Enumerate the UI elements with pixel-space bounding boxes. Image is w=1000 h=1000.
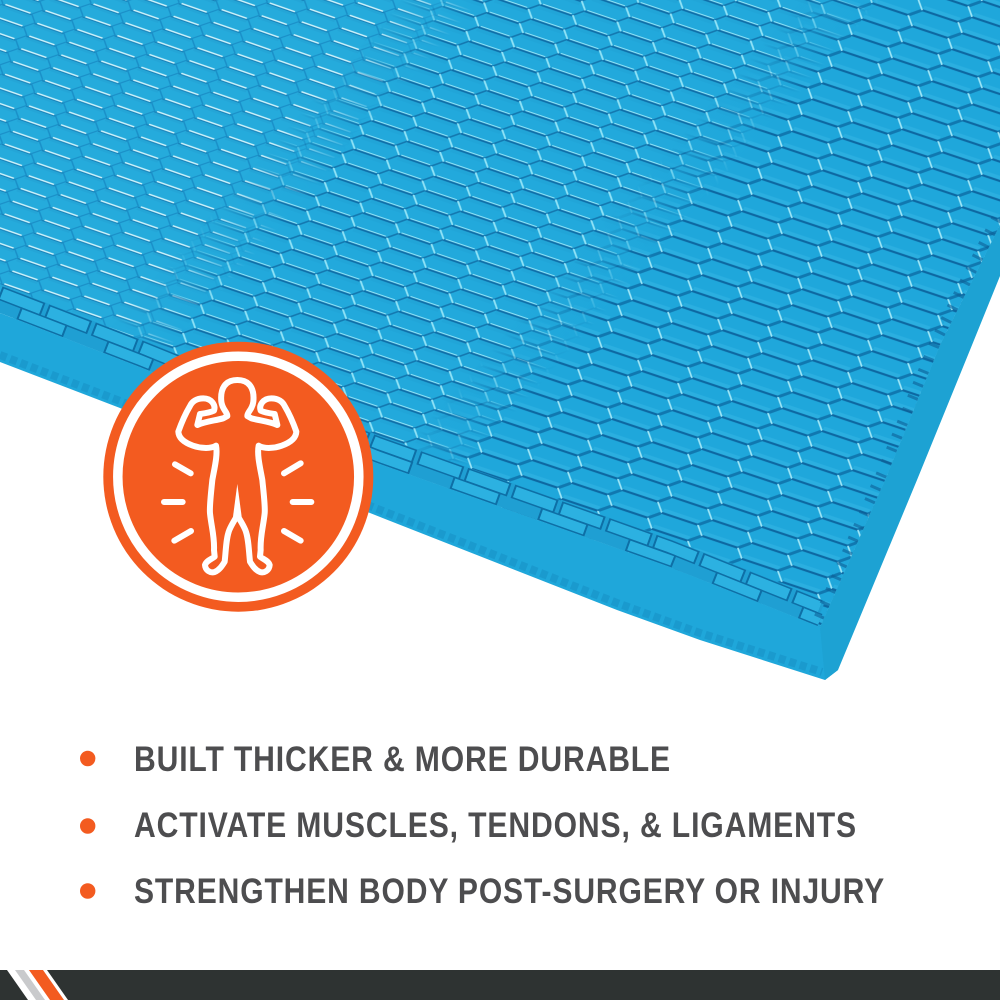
bullet 1: BUILT THICKER & MORE DURABLE <box>134 740 671 779</box>
footer bar <box>0 970 1000 1000</box>
front face fine ribs <box>0 355 822 672</box>
bullet 3: STRENGTHEN BODY POST-SURGERY OR INJURY <box>134 872 885 911</box>
crushed rim along front edge <box>0 300 820 614</box>
icon: radiating ticks <box>164 463 311 541</box>
badge disc <box>103 342 373 612</box>
crushed rim along right edge <box>822 220 1000 620</box>
footer stripes <box>7 970 68 1000</box>
badge: strength icon <box>103 342 373 612</box>
pad front side face <box>0 313 838 680</box>
icon: inner leg spike <box>233 484 242 517</box>
badge white ring <box>118 356 359 597</box>
pad right side face <box>820 225 1000 680</box>
bullet 2: ACTIVATE MUSCLES, TENDONS, & LIGAMENTS <box>134 806 857 845</box>
icon: flexing figure <box>164 380 311 572</box>
feature list <box>80 740 885 911</box>
balance pad photo <box>0 0 1000 700</box>
honeycomb texture <box>0 0 1000 627</box>
pad top surface <box>0 0 1000 627</box>
